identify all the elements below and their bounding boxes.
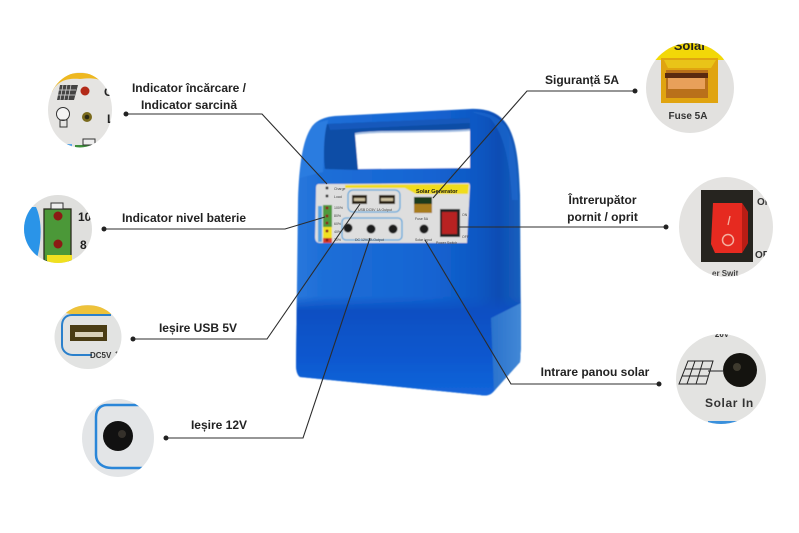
callout: solar panel input: [425, 240, 769, 426]
panel text: Power Switch: [436, 241, 457, 245]
label: battery level indicator: Indicator nivel baterie: [122, 211, 246, 225]
leader line: [458, 224, 668, 230]
photo: fuse: Fuse 5A: [669, 111, 707, 122]
label: power switch: Întrerupător: [567, 192, 637, 207]
panel text: 80%: [334, 214, 341, 218]
photo: rocker switch: ON: [757, 197, 772, 208]
handle opening: [324, 118, 470, 170]
photo: rocker switch: [679, 177, 773, 277]
photo: battery level: 8: [80, 238, 87, 252]
panel text: 100%: [334, 206, 343, 210]
photo: USB port: DC5V: [90, 351, 112, 360]
leader line: [124, 112, 327, 184]
leader line: [164, 238, 370, 440]
panel text: Fuse 5A: [415, 217, 429, 221]
photo: solar input: [676, 334, 766, 424]
photo: battery level: 10: [78, 210, 92, 224]
panel text: Solar Generator: [416, 189, 458, 195]
panel text: [334, 187, 469, 245]
panel text: Load: [334, 195, 342, 199]
panel text: USB DC5V 1A Output: [358, 208, 392, 212]
panel text: ON: [462, 213, 468, 217]
label: fuse: Siguranță 5A: [545, 73, 619, 87]
photo: fuse: [646, 43, 734, 133]
callout: battery level indicator: [20, 193, 325, 265]
panel text: Solar Input: [415, 238, 432, 242]
photo: battery level: [24, 195, 92, 263]
photo: USB port: 1: [115, 352, 119, 358]
photo: rocker switch: er Swit: [712, 269, 739, 278]
photo: solar input: Solar In: [705, 396, 754, 410]
callout: power switch: [458, 175, 778, 280]
leader line: [130, 204, 360, 342]
leader line: [425, 240, 662, 386]
panel text: 60%: [334, 222, 341, 226]
panel text: DC 12V/2A Output: [355, 238, 384, 242]
leader line: [433, 88, 638, 198]
control panel: [315, 183, 470, 243]
callout: 12V output: [80, 238, 370, 480]
panel text: OFF: [462, 235, 469, 239]
callout: charge and load indicator: [45, 70, 327, 184]
label: solar panel input: Intrare panou solar: [541, 365, 650, 379]
callout: USB output: [52, 204, 360, 371]
leader line: [102, 217, 325, 232]
photo: rocker switch: OF: [755, 250, 769, 261]
device body: [296, 109, 521, 396]
label: charge and load indicator: [132, 81, 247, 112]
label: 12V output: Ieșire 12V: [191, 418, 247, 432]
label: USB output: Ieșire USB 5V: [159, 321, 237, 335]
photo: 12V jack: [80, 398, 156, 480]
photo: charge and load indicators: L: [107, 112, 114, 126]
label: power switch: [567, 192, 638, 224]
panel text: 20%: [334, 238, 341, 242]
label: power switch: pornit / oprit: [567, 210, 638, 224]
callout: fuse: [433, 38, 738, 198]
panel text: Charge: [334, 187, 346, 191]
device: solar generator: [296, 109, 521, 400]
label: charge and load indicator: Indicator încărcare /: [132, 81, 247, 95]
label: charge and load indicator: Indicator sarcină: [141, 98, 237, 112]
photo: solar input: 20V: [715, 330, 730, 339]
photo: USB port: [54, 305, 122, 369]
photo: charge and load indicators: C: [104, 85, 113, 99]
panel text: 40%: [334, 230, 341, 234]
photo: charge and load indicators: [48, 72, 112, 148]
photo: fuse: Solar: [674, 38, 706, 53]
